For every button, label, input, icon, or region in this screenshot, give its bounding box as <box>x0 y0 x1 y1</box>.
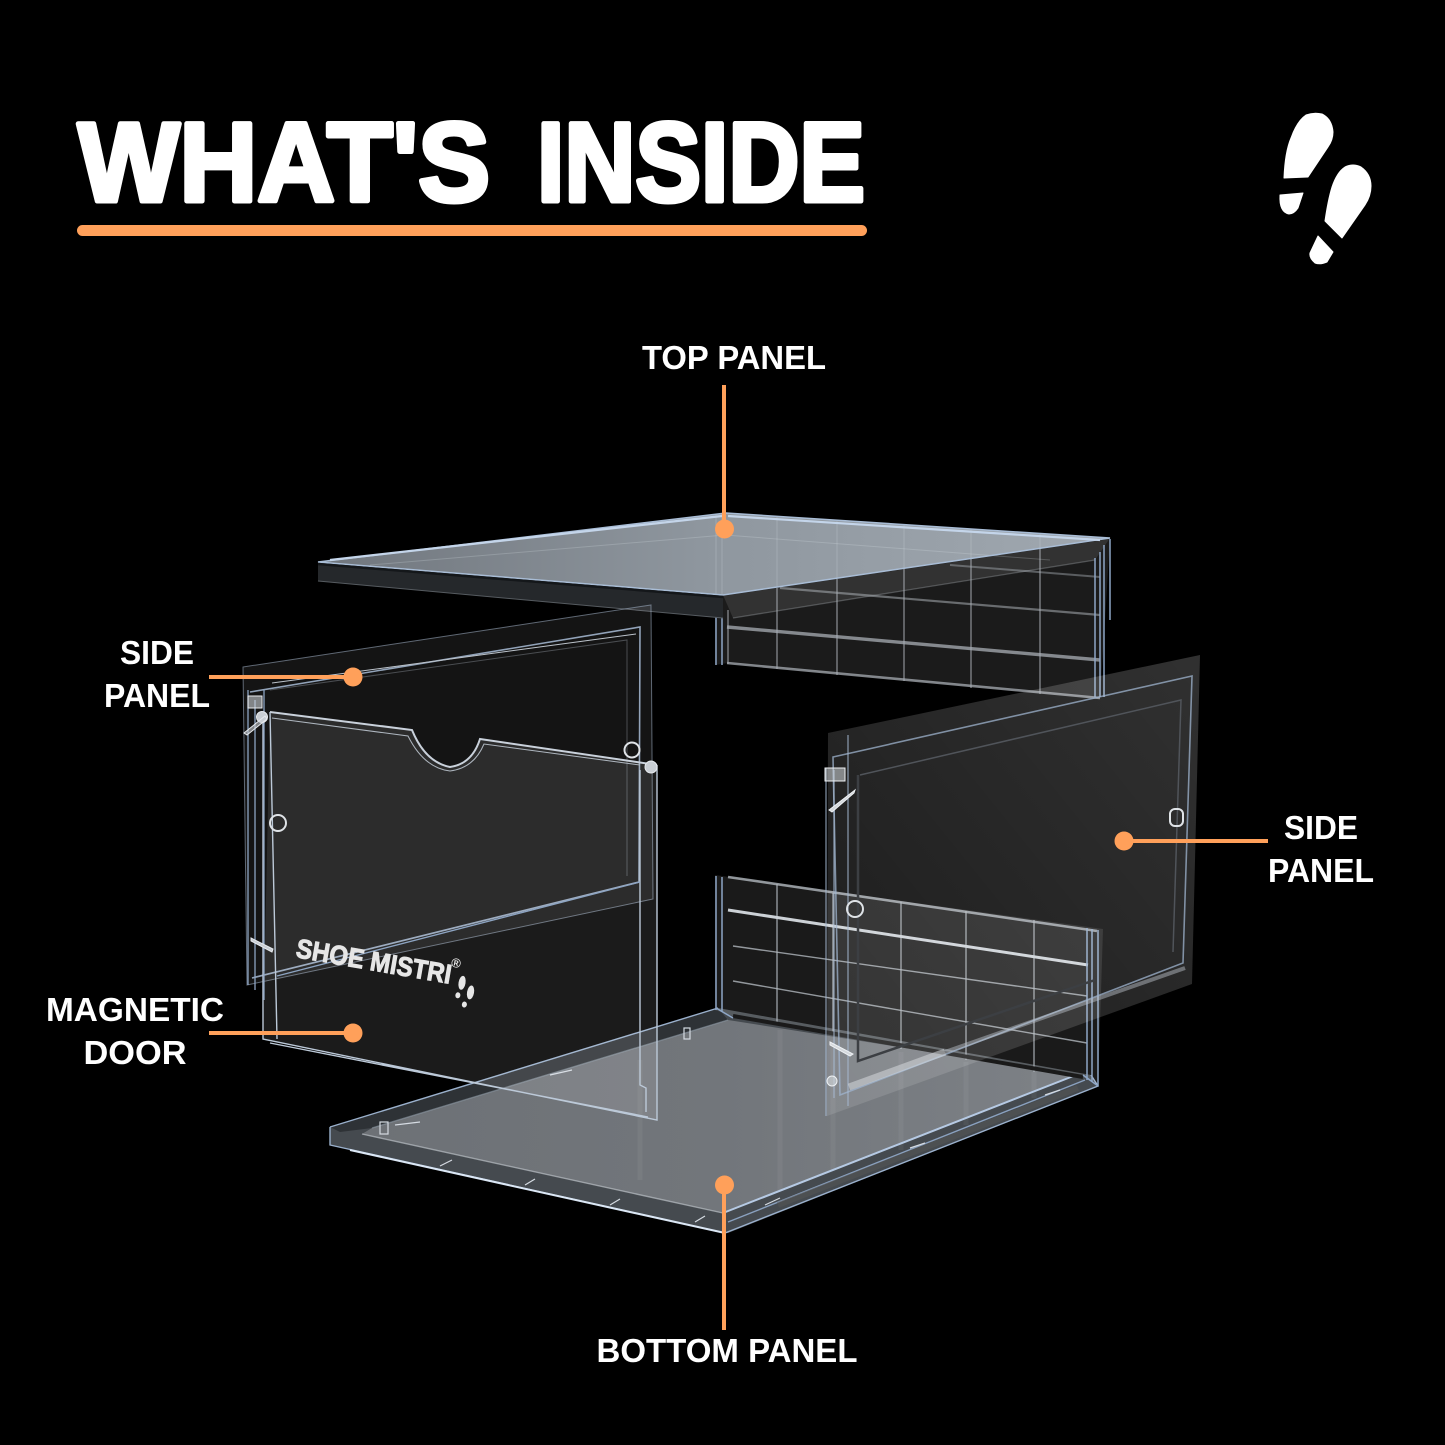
label: magnetic door <box>46 991 362 1071</box>
label: magnetic door: DOOR <box>84 1034 187 1071</box>
label: right side panel: SIDE <box>1284 809 1358 846</box>
title underline <box>77 225 867 236</box>
panel: bottom panel back wall <box>715 875 1103 1086</box>
hinge detail <box>825 768 855 1086</box>
magnet: right panel <box>847 809 1183 917</box>
title <box>78 100 865 225</box>
logo: SHOE MISTRI <box>291 928 480 1009</box>
magnets: door <box>270 742 640 831</box>
floor clips <box>380 1028 1060 1222</box>
logo: SHOE MISTRI: SHOE MISTRI <box>294 933 454 990</box>
label: left side panel <box>104 634 362 714</box>
label: right side panel: PANEL <box>1268 852 1374 889</box>
logo: SHOE MISTRI: ® <box>450 955 463 971</box>
label: bottom panel <box>596 1176 858 1369</box>
label: bottom panel: BOTTOM PANEL <box>596 1332 858 1369</box>
panel: top panel back wall <box>715 538 1110 698</box>
panel: top panel <box>318 513 1110 618</box>
title: WHAT'S <box>78 100 490 225</box>
label: magnetic door: MAGNETIC <box>46 991 224 1028</box>
title: INSIDE <box>537 100 865 225</box>
label: left side panel: SIDE <box>120 634 194 671</box>
panel: right side panel <box>825 655 1200 1116</box>
label: right side panel <box>1114 809 1374 889</box>
panel: left side panel <box>243 605 653 985</box>
panel: magnetic door <box>244 690 657 1120</box>
label: left side panel: PANEL <box>104 677 210 714</box>
icon: footprints logo <box>1280 113 1371 264</box>
panel: bottom panel <box>330 1008 1098 1233</box>
label: top panel: TOP PANEL <box>642 339 826 376</box>
label: top panel <box>642 339 826 538</box>
hinge detail <box>244 696 657 952</box>
